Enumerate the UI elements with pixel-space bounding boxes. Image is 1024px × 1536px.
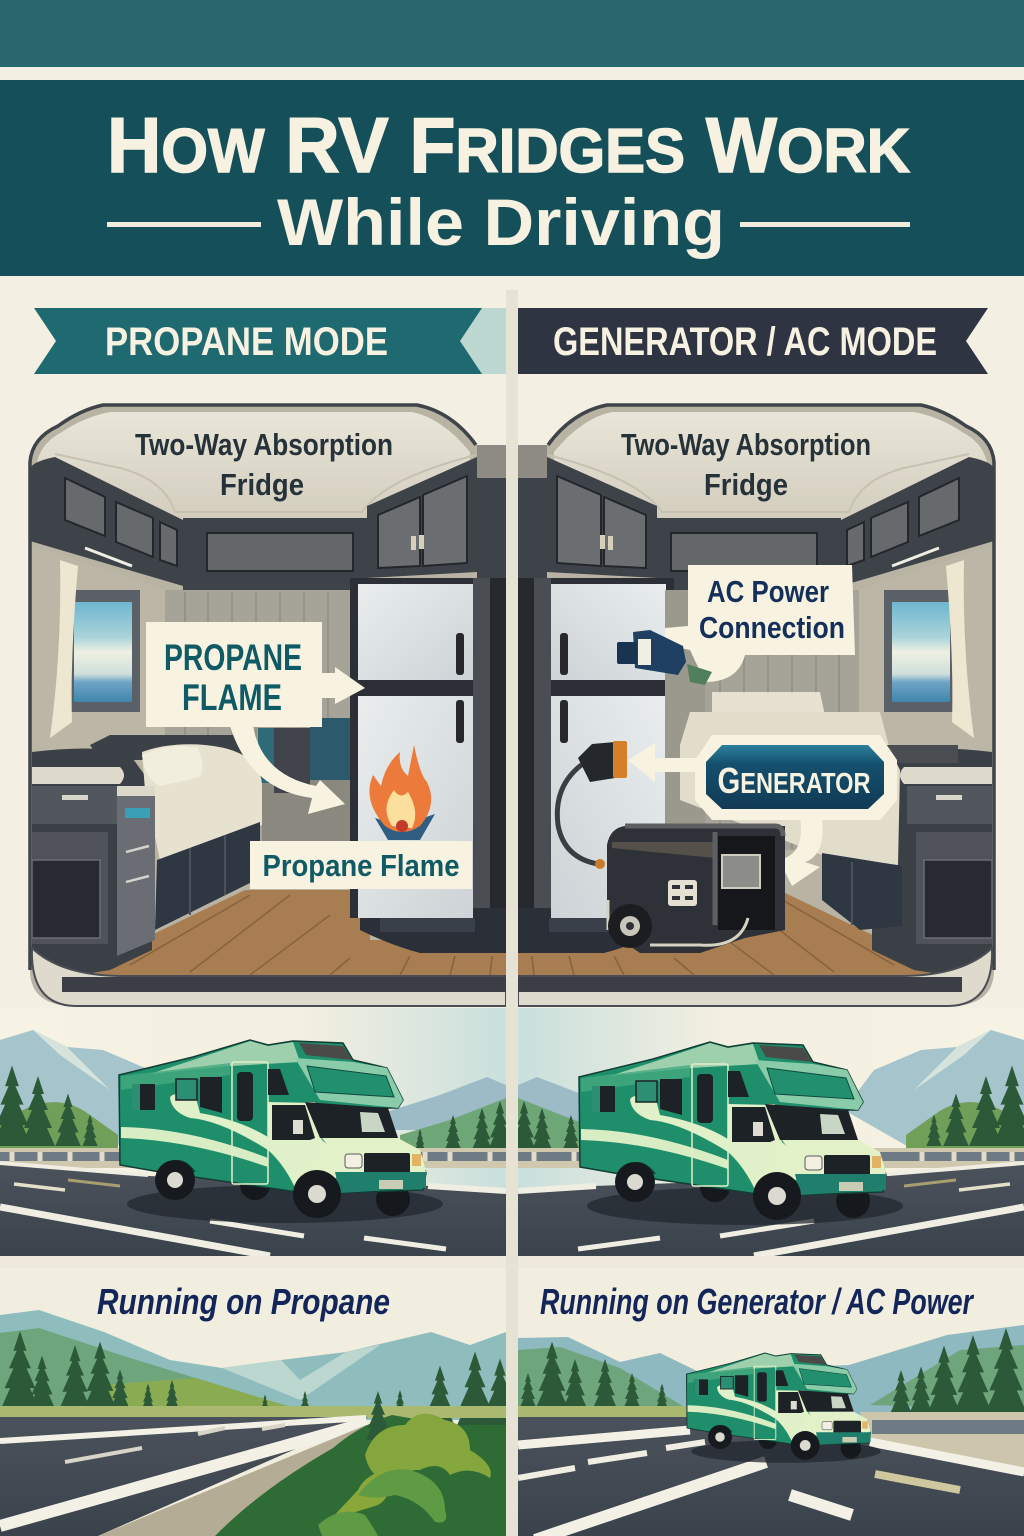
panel: propane interior [30,405,506,1031]
banner: propane mode [34,308,506,374]
callout: propane flame: FLAME [182,677,282,718]
sofa [142,744,262,930]
scene: left road with RV [0,1008,512,1256]
panel: propane interior: Fridge [220,467,304,502]
scene: right road with RV [512,1008,1024,1256]
arrow: generator to plug [628,743,700,782]
callout: propane flame [146,622,322,727]
icon: AC plug [617,630,712,685]
panel: generator interior [518,405,994,1031]
fridge label: Two-Way Absorption [621,427,871,462]
title line one: HOW RV FRIDGES WORK [107,101,910,189]
title line two: While Driving [277,185,725,259]
banner: generator / AC mode: GENERATOR / AC MODE [553,320,937,364]
label: propane flame [250,841,472,889]
banner: propane mode: PROPANE MODE [105,320,388,364]
title band [0,80,1024,276]
top teal band [0,0,1024,67]
arrow: generator down [778,818,823,886]
panel: running on generator / AC power [518,1268,1024,1536]
side cabinet [117,786,155,956]
caption: running on propane: Running on Propane [97,1281,390,1322]
callout: AC power connection: Connection [699,610,845,645]
bed [665,590,958,930]
generator pill [695,735,897,820]
generator pill: GENERATOR [718,760,871,801]
icon: generator [607,826,785,953]
callout: AC power connection: AC Power [707,574,829,609]
arrow: curved to flame [230,726,345,814]
banner: generator / AC mode [518,308,988,374]
arrow: label to fridge [320,667,365,704]
callout: propane flame: PROPANE [164,637,302,678]
icon: small RV [686,1353,881,1463]
horizontal gutters [0,1256,1024,1268]
callout: AC power connection [665,565,855,682]
back furniture [90,718,350,853]
fridge label: Two-Way Absorption [135,427,393,462]
panel: running on propane [0,1268,516,1536]
icon: flame [369,745,435,840]
panel: generator interior: Fridge [704,467,788,502]
center divider [506,290,518,1536]
label: propane flame: Propane Flame [262,848,460,883]
icon: power cord [557,741,627,869]
